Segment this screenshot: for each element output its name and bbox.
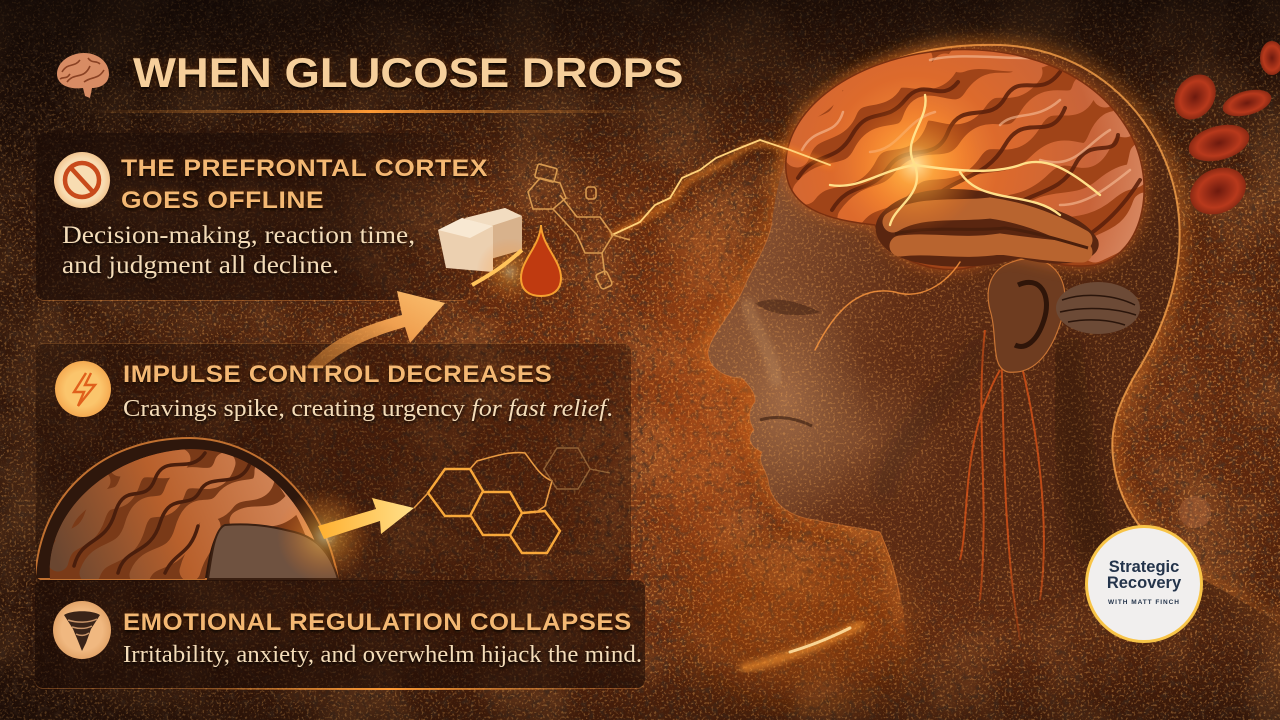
logo badge: Strategic Recovery [1085,525,1203,643]
ear [988,259,1065,372]
panel: impulse control [36,343,631,581]
body text: and judgment all decline. [62,252,339,279]
title rule [85,110,655,113]
bottom glow rule [180,688,600,690]
head silhouette [700,40,1280,720]
body text [62,222,415,282]
icon: lightning bolt [55,361,111,417]
nerve bolt from molecule to brain [612,140,960,350]
brain [786,50,1145,270]
cerebellum [1056,282,1140,334]
arrow: upward curved [305,291,445,368]
logo badge: Strategic Recovery: Recovery [1107,574,1181,592]
heading: IMPULSE CONTROL DECREASES [123,361,552,388]
heading: THE PREFRONTAL CORTEX [121,155,488,182]
panel: emotional regulation [35,580,645,688]
illustration: sugar cubes, blood drop and molecule [438,163,630,302]
icon: tornado [53,601,111,659]
illustration: eroding brain, arrow, hexagons [36,437,610,580]
body text: Cravings spike, creating urgency for fast relief. [123,396,613,422]
central hot spot [847,97,983,233]
heading [120,155,488,214]
title: WHEN GLUCOSE DROPS [133,49,683,96]
logo badge: Strategic Recovery: WITH MATT FINCH [1108,599,1180,606]
panel: prefrontal cortex [36,133,470,300]
title icon: brain [57,53,109,98]
body text: Decision-making, reaction time, [62,222,415,249]
heading: GOES OFFLINE [121,187,324,214]
bokeh [1179,496,1211,528]
glowing streak at bottom [745,625,860,668]
heading: EMOTIONAL REGULATION COLLAPSES [123,609,632,636]
temporal lobe [876,189,1099,267]
red blood cells [1166,41,1280,223]
icon: prohibition sign [54,152,110,208]
body text: Irritability, anxiety, and overwhelm hijack the mind. [123,642,642,668]
logo badge: Strategic Recovery: Strategic [1109,558,1179,576]
